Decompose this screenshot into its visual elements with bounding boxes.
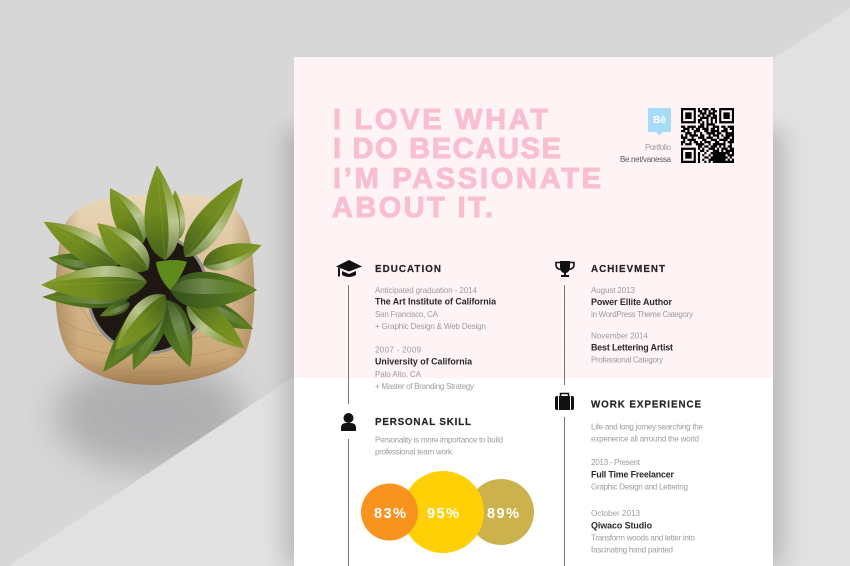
- entry: power ellite author: [591, 286, 694, 319]
- skill circles chart: 95%: [427, 506, 459, 522]
- skill circles chart: 89%: [487, 506, 519, 522]
- timeline line: education: [348, 285, 350, 404]
- leaves: [36, 164, 266, 381]
- entry: university of california: [375, 346, 475, 391]
- entry: full time freelancer: [591, 458, 688, 492]
- panel: work experience: [555, 394, 703, 566]
- heading: achievement: ACHIEVMENT: [591, 264, 665, 275]
- entry: university of california: 2007 - 2009: [375, 346, 421, 354]
- personal skill description: professional team work.: [375, 448, 454, 456]
- title: I DO BECAUSE: [333, 133, 561, 165]
- panel: achievement: [556, 261, 694, 385]
- entry: best lettering artist: Best Lettering Artist: [591, 342, 673, 352]
- icon: person: [341, 413, 356, 431]
- entry: qiwaco studio: October 2013: [591, 509, 640, 518]
- entry: art institute: The Art Institute of California: [375, 296, 496, 306]
- entry: full time freelancer: Graphic Design and Lettering: [591, 482, 688, 492]
- icon: trophy: [556, 261, 574, 277]
- title: [332, 104, 601, 224]
- heading: work experience: WORK EXPERIENCE: [591, 400, 701, 410]
- work experience intro: [591, 422, 703, 444]
- work experience intro: experience all arround the world: [591, 434, 699, 444]
- icon: briefcase: [555, 394, 574, 410]
- title: I’M PASSIONATE: [333, 163, 601, 195]
- entry: best lettering artist: November 2014: [591, 332, 648, 340]
- icon: graduation cap: [336, 260, 362, 277]
- entry: art institute: San Francisco, CA: [375, 310, 439, 319]
- entry: university of california: Palo Alto, CA: [375, 370, 422, 379]
- work experience intro: Life and long jorney searching the: [591, 422, 703, 432]
- entry: university of california: + Master of Branding Strategy: [375, 382, 475, 391]
- entry: qiwaco studio: Qiwaco Studio: [591, 520, 653, 530]
- timeline line: work experience: [564, 417, 566, 566]
- timeline line: achievement: [564, 285, 566, 385]
- personal skill description: [375, 436, 503, 456]
- heading: personal skill: PERSONAL SKILL: [375, 417, 471, 428]
- wooden pot: [56, 194, 254, 385]
- entry: art institute: + Graphic Design & Web Design: [375, 322, 486, 331]
- plant in wooden pot: [36, 164, 266, 385]
- personal skill description: Personality is more importance to build: [375, 436, 503, 444]
- heading: education: EDUCATION: [375, 264, 441, 275]
- panel: education: [336, 260, 496, 404]
- entry: best lettering artist: Professional Category: [591, 356, 664, 364]
- portfolio label: Portfolio: [645, 143, 671, 152]
- entry: best lettering artist: [591, 332, 673, 364]
- entry: power ellite author: Power Ellite Author: [591, 297, 673, 307]
- entry: qiwaco studio: fascinating hand painted: [591, 546, 673, 554]
- pot opening with soil: [88, 233, 208, 353]
- timeline line: personal skill: [348, 439, 350, 566]
- entry: power ellite author: August 2013: [591, 286, 635, 295]
- panel: personal skill: [341, 413, 534, 566]
- entry: art institute: Anticipated graduation - 2014: [375, 286, 477, 295]
- resume sheet: [294, 57, 773, 566]
- QR code: [681, 109, 734, 162]
- entry: art institute: [375, 286, 496, 331]
- portfolio block: [620, 108, 671, 164]
- entry: full time freelancer: Full Time Freelancer: [591, 470, 675, 480]
- entry: university of california: University of California: [375, 356, 472, 366]
- skill circles chart: 83%: [374, 506, 406, 522]
- portfolio url: Be.net/vanessa: [620, 155, 671, 164]
- entry: power ellite author: in WordPress Theme Category: [591, 310, 694, 319]
- title: I LOVE WHAT: [333, 104, 548, 136]
- entry: qiwaco studio: [591, 509, 695, 554]
- skill circles chart: [361, 471, 534, 553]
- icon: behance speech tag: Bē: [653, 115, 666, 126]
- title: ABOUT IT.: [332, 192, 493, 224]
- entry: full time freelancer: 2013 - Present: [591, 458, 641, 467]
- entry: qiwaco studio: Transform woods and letter into: [591, 534, 695, 542]
